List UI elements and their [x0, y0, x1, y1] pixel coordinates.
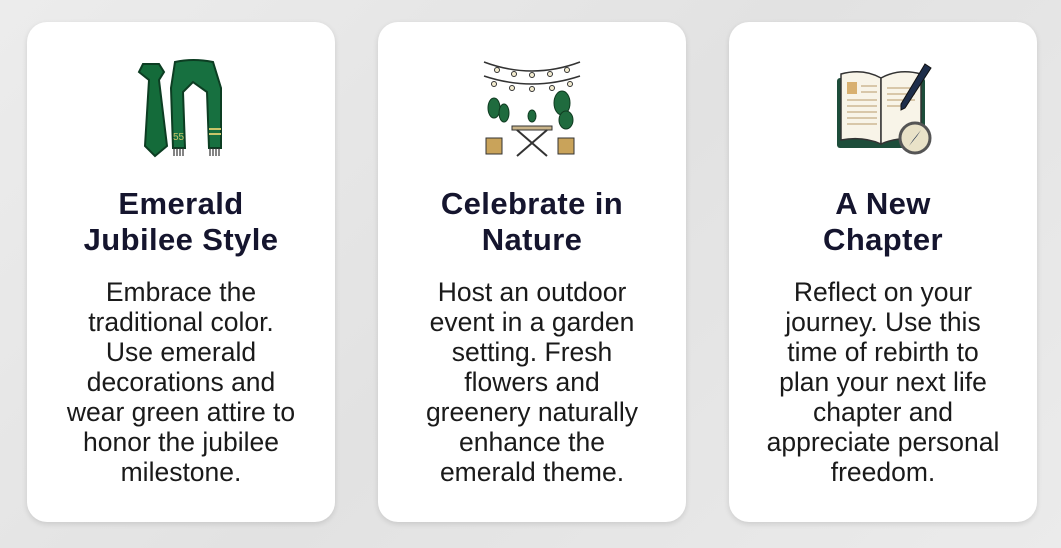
heading: Nature: [482, 222, 582, 257]
heading: Celebrate in: [441, 186, 623, 221]
icon: book, pen, compass: [837, 63, 932, 154]
text block: enhance the: [459, 427, 605, 457]
icon: tie and scarf: 55: [173, 132, 185, 143]
text block: [66, 277, 295, 487]
text block: freedom.: [831, 457, 935, 487]
text block: greenery naturally: [426, 397, 638, 427]
heading: Jubilee Style: [84, 222, 278, 257]
panel: celebrate in nature: [378, 22, 686, 522]
text block: plan your next life: [779, 367, 987, 397]
text block: time of rebirth to: [787, 337, 979, 367]
text block: decorations and: [87, 367, 275, 397]
text block: honor the jubilee: [83, 427, 279, 457]
text block: emerald theme.: [440, 457, 624, 487]
text block: journey. Use this: [785, 307, 981, 337]
heading: [441, 186, 623, 257]
heading: Emerald: [118, 186, 244, 221]
text block: Host an outdoor: [438, 277, 626, 307]
panel: a new chapter: [729, 22, 1037, 522]
text block: Embrace the: [106, 277, 256, 307]
text block: [426, 277, 638, 487]
icon: garden table: [484, 61, 580, 157]
text block: setting. Fresh: [452, 337, 612, 367]
text block: appreciate personal: [767, 427, 999, 457]
text block: wear green attire to: [67, 397, 295, 427]
text block: milestone.: [121, 457, 241, 487]
heading: [823, 186, 943, 257]
text block: Use emerald: [106, 337, 256, 367]
heading: A New: [835, 186, 931, 221]
text block: event in a garden: [430, 307, 634, 337]
panel: emerald jubilee style: [27, 22, 335, 522]
text block: [767, 277, 999, 487]
heading: Chapter: [823, 222, 943, 257]
icon: tie and scarf: [138, 59, 222, 158]
heading: [84, 186, 278, 257]
text block: Reflect on your: [794, 277, 972, 307]
text block: traditional color.: [88, 307, 274, 337]
text block: chapter and: [813, 397, 953, 427]
text block: flowers and: [464, 367, 600, 397]
